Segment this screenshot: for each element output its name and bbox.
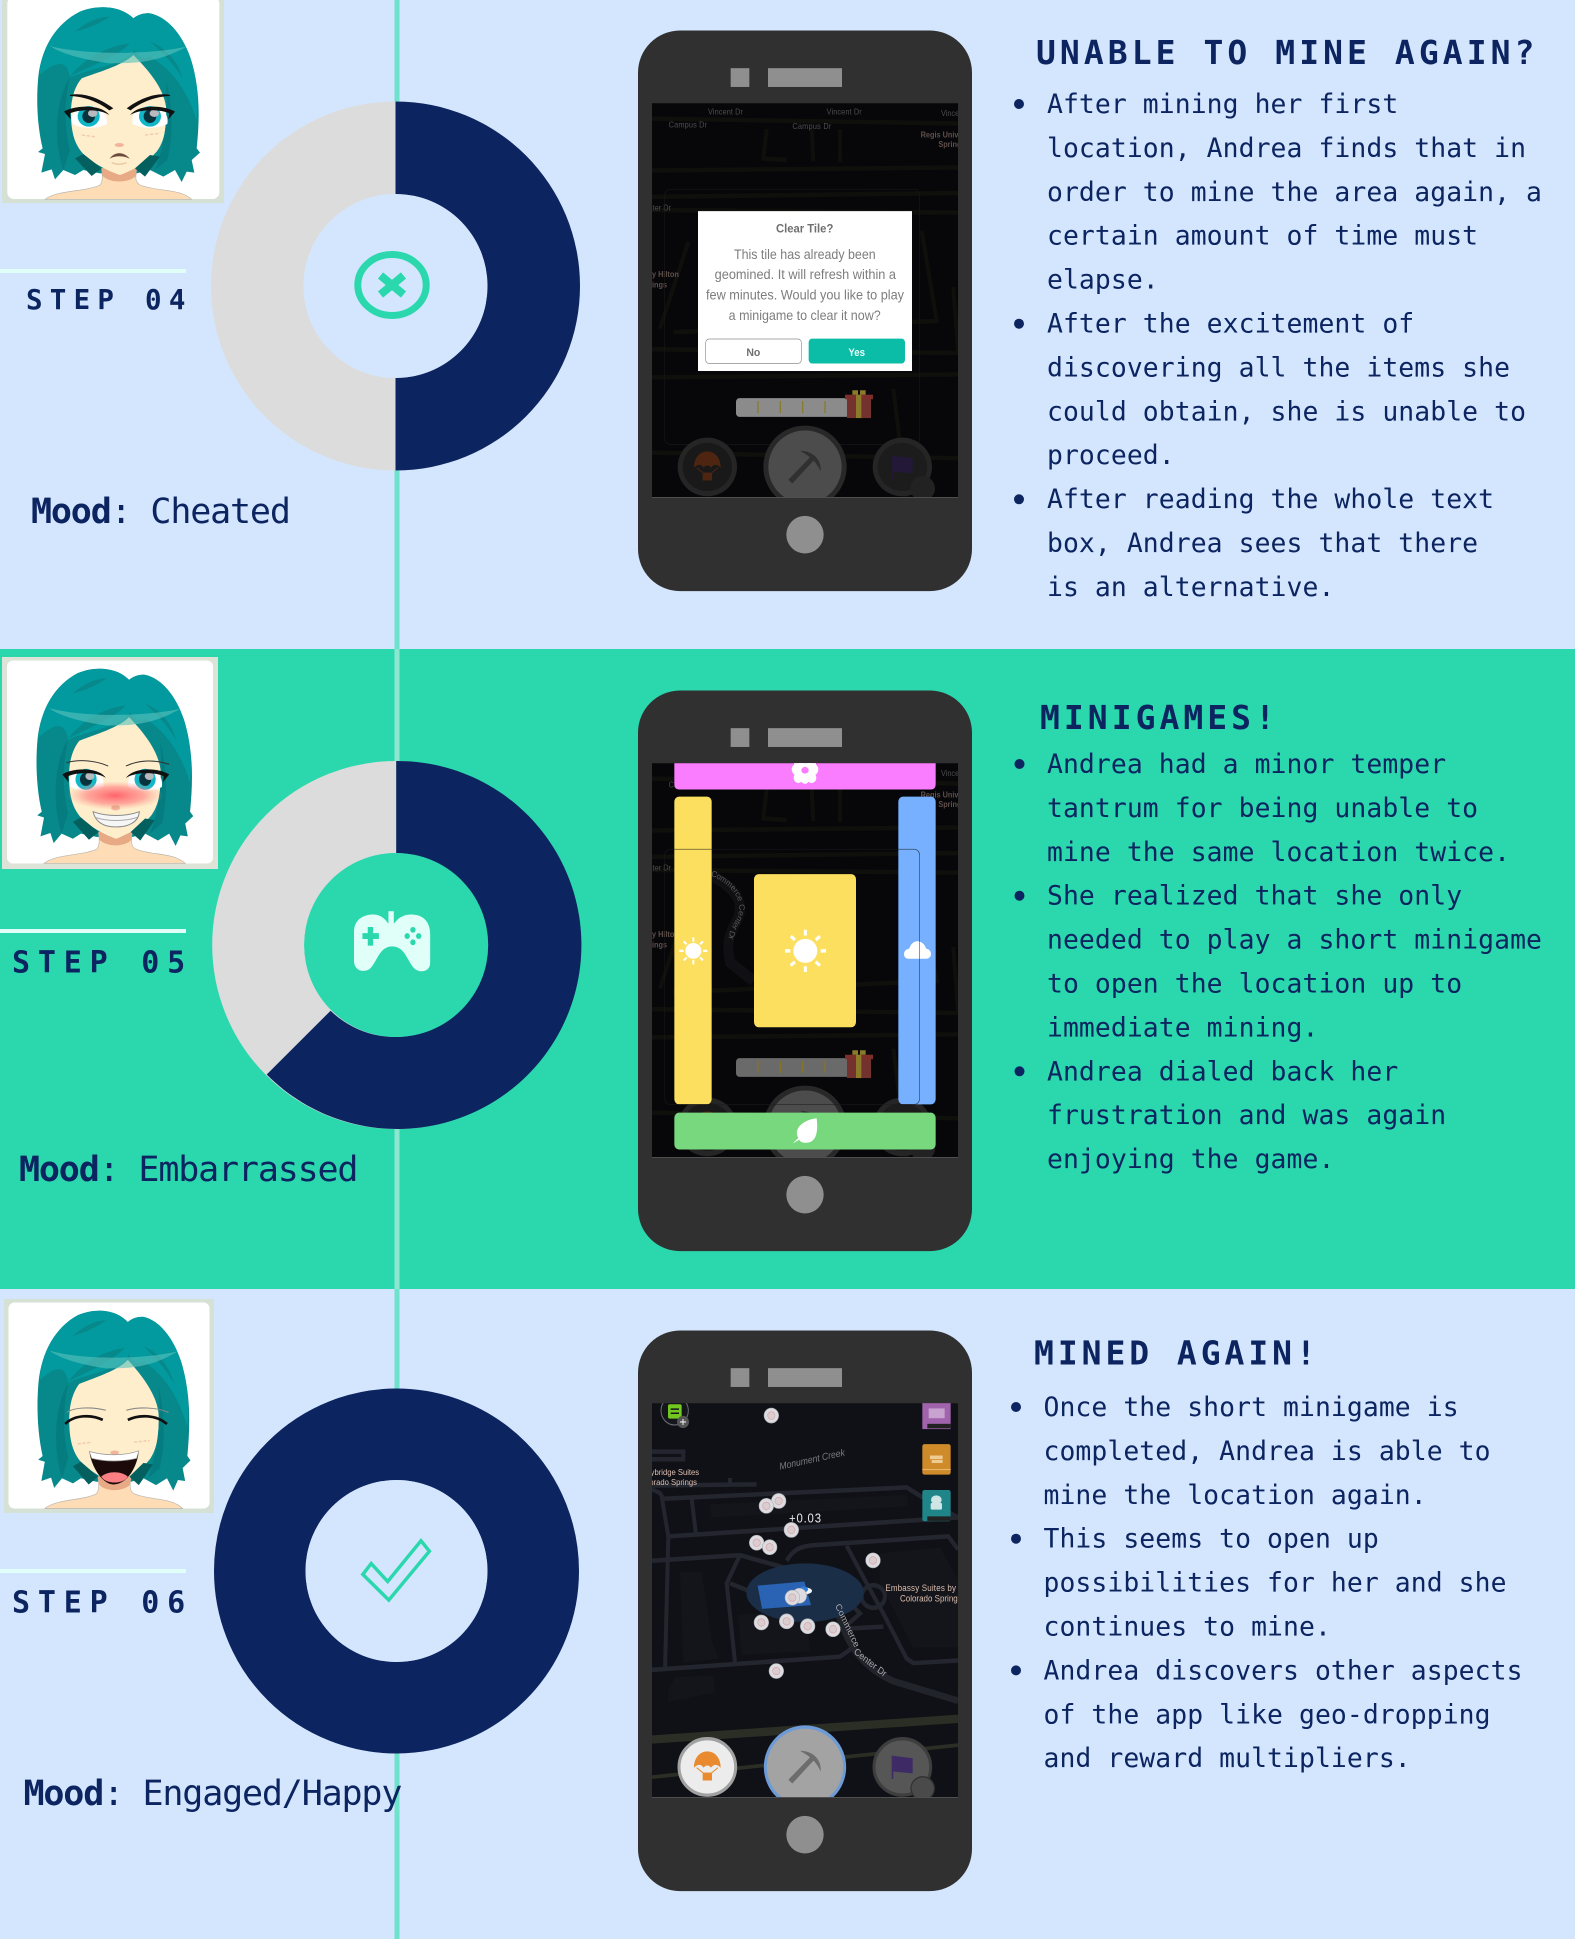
phone: Clear Tile dialog: Vincent Dr [827, 107, 862, 117]
step divider and label: STEP 04: STEP 04 [26, 284, 193, 316]
card: pink flower bar [674, 763, 936, 790]
dialog: Clear Tile: a minigame to clear it now? [729, 307, 881, 323]
bullet dots [1014, 759, 1024, 1076]
heading: Minigames: MINIGAMES! [1040, 698, 1279, 737]
bullet text: step 06: mine the location again. [1044, 1480, 1427, 1511]
phone: minigame: ter Dr [653, 863, 671, 873]
dialog: Clear Tile [698, 211, 912, 371]
bullet text: step 04: could obtain, she is unable to [1047, 396, 1526, 427]
bullet text: step 05: immediate mining. [1047, 1012, 1318, 1043]
coins [749, 1408, 880, 1679]
icon: circled X [358, 254, 426, 316]
phone: minigame: Commerce Center Dr [712, 871, 745, 940]
phone: minigame: ings [652, 940, 668, 950]
map labels: Commerce [833, 1602, 862, 1649]
phone: minigame: Springs [938, 799, 966, 809]
background: step 06 section [0, 1289, 1575, 1939]
bullet text: step 04: location, Andrea finds that in [1047, 133, 1526, 164]
panel: step 05 [0, 657, 1542, 1252]
bullet text: step 06: continues to mine. [1044, 1612, 1331, 1642]
step divider and label: STEP 04 [0, 269, 193, 316]
phone: minigame: Campus [669, 780, 696, 790]
map labels: +0.03 [789, 1511, 821, 1526]
map labels: Embassy Suites by [885, 1582, 957, 1593]
bullet text: step 04: After mining her first [1047, 89, 1398, 120]
action buttons: parachute, pick, flag [679, 1727, 934, 1807]
card: yellow sun bar [674, 797, 712, 1104]
phone: Clear Tile dialog: Vincent [941, 109, 966, 118]
map labels [649, 1447, 962, 1679]
bullet text: step 05: Andrea had a minor temper [1047, 749, 1446, 780]
phone: Clear Tile dialog: ings [652, 280, 668, 290]
bullet text: step 05: frustration and was again [1047, 1100, 1446, 1131]
step divider and label: STEP 05 [0, 929, 193, 980]
card: blue cloud bar [898, 797, 936, 1104]
progress bar and gift [736, 390, 873, 418]
bullet text: step 05: needed to play a short minigame [1047, 925, 1542, 956]
icon: check mark [363, 1541, 429, 1600]
bullet text: step 06: This seems to open up [1044, 1524, 1379, 1555]
timeline vertical line [394, 0, 400, 1939]
bullet text: step 04: box, Andrea sees that there [1047, 528, 1478, 559]
bullet text: step 04: discovering all the items she [1047, 352, 1510, 383]
dialog: Clear Tile: Yes [848, 346, 865, 359]
phone: Clear Tile dialog: Springs [938, 139, 966, 149]
donut chart: half navy, half gray [257, 102, 580, 471]
bullet text: step 05: She realized that she only [1047, 881, 1462, 912]
portrait: angry Andrea [2, 0, 224, 203]
background: step 05 section [0, 649, 1575, 1289]
bullet text: step 05: enjoying the game. [1047, 1144, 1334, 1175]
phone: Clear Tile dialog: ter Dr [653, 203, 671, 213]
donut chart: full navy [260, 1434, 533, 1708]
portrait: happy Andrea [4, 1299, 214, 1513]
mood label: Cheated: Mood: Cheated [31, 492, 290, 532]
map labels: Colorado Springs [900, 1593, 962, 1604]
heading: Unable to mine again: UNABLE TO MINE AGAIN? [1036, 33, 1538, 72]
bullet text: step 06: Andrea discovers other aspects [1044, 1655, 1523, 1686]
icon: game controller [354, 911, 430, 971]
mood label: Embarrassed: Mood: Embarrassed [19, 1150, 357, 1190]
bullet text: step 04: elapse. [1047, 265, 1159, 296]
bullet dots [1014, 99, 1024, 504]
bullet text: step 05: mine the same location twice. [1047, 837, 1510, 868]
phone: Clear Tile dialog: Campus Dr [792, 122, 832, 131]
dialog: Clear Tile: This tile has already been [734, 246, 876, 262]
map labels: Center Dr [852, 1646, 888, 1679]
progress bar and gift [736, 1050, 873, 1078]
phone: minigame [638, 690, 972, 1252]
donut chart: mostly navy [258, 761, 581, 1129]
mood label: Engaged/Happy: Engaged/Happy [142, 1774, 401, 1814]
dialog: Clear Tile: few minutes. Would you like to play [706, 287, 905, 303]
panel: step 04 [0, 0, 1558, 603]
phone: Clear Tile dialog [638, 31, 979, 591]
bullet text: step 04: is an alternative. [1047, 572, 1334, 603]
bullet text: step 04: After the excitement of [1047, 308, 1414, 340]
bullet text: step 06: completed, Andrea is able to [1044, 1436, 1491, 1467]
bullet text: step 05: tantrum for being unable to [1047, 793, 1478, 824]
bullet text: step 04: proceed. [1047, 440, 1175, 471]
bullet text: step 06: of the app like geo-dropping [1044, 1699, 1491, 1730]
bullet text: step 04: order to mine the area again, a [1047, 177, 1542, 208]
bullet text: step 04: certain amount of time must [1047, 221, 1478, 252]
bullet text: step 05: to open the location up to [1047, 968, 1462, 1000]
phone: map with coins [638, 1331, 972, 1891]
phone: minigame: Vincent [941, 769, 966, 778]
step divider and label: STEP 06: STEP 06 [12, 1586, 193, 1620]
portrait: embarrassed Andrea [2, 657, 218, 869]
bullet text: step 06: Once the short minigame is [1044, 1392, 1459, 1423]
phone: minigame: Regis University [921, 790, 979, 799]
phone: Clear Tile dialog: Regis University [921, 130, 979, 139]
icon: green task badge [660, 1403, 689, 1428]
background: step 04 section [0, 0, 1575, 649]
step divider and label: STEP 06 [0, 1569, 193, 1620]
dialog: Clear Tile: geomined. It will refresh within a [715, 267, 897, 282]
map labels: Monument Creek [779, 1447, 846, 1472]
map labels: ybridge Suites [651, 1468, 699, 1477]
side buttons [922, 1397, 951, 1521]
mood label: Engaged/Happy: Mood: [24, 1774, 123, 1814]
bullet text: step 04: After reading the whole text [1047, 484, 1494, 515]
card: green leaf bar [674, 1113, 936, 1150]
panel: step 06 [0, 1299, 1539, 1891]
phone: minigame: y Hilton [652, 930, 679, 939]
card: yellow center card [754, 874, 856, 1027]
phone: Clear Tile dialog: y Hilton [652, 270, 679, 279]
phone: Clear Tile dialog: Campus Dr [669, 120, 707, 130]
bullet text: step 06: and reward multipliers. [1044, 1743, 1411, 1774]
dialog: Clear Tile: Clear Tile? [776, 223, 833, 236]
bullet text: step 06: possibilities for her and she [1044, 1568, 1507, 1599]
map labels: orado Springs [649, 1477, 697, 1487]
bullet dots [1011, 1402, 1021, 1675]
heading: Mined again: MINED AGAIN! [1034, 1334, 1320, 1372]
bullet text: step 05: Andrea dialed back her [1047, 1056, 1398, 1087]
dialog: Clear Tile: No [746, 346, 761, 359]
step divider and label: STEP 05: STEP 05 [12, 946, 193, 980]
blue location highlight [746, 1563, 864, 1622]
phone: Clear Tile dialog: Vincent Dr [708, 107, 743, 117]
